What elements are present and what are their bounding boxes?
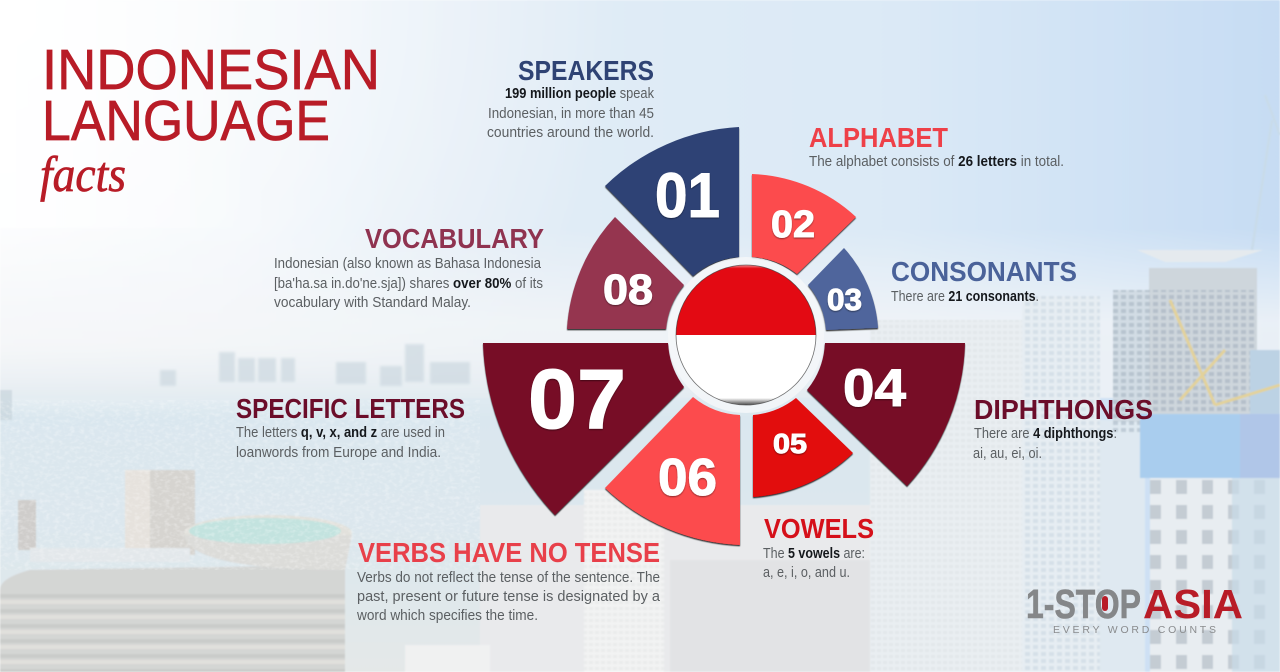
logo: 1-Stop Asia xyxy=(1026,581,1243,636)
panel: vocabulary: vocabulary with Standard Malay. xyxy=(274,295,471,311)
segment 08: 08 xyxy=(603,266,653,314)
panel: verbs have no tense xyxy=(356,537,661,624)
panel: speakers xyxy=(487,55,655,141)
panel: alphabet xyxy=(809,122,1064,170)
segment 04 xyxy=(807,343,965,486)
segment 01: 01 xyxy=(655,161,720,231)
segment 03 xyxy=(808,248,878,330)
panel: verbs have no tense: past, present or future tense is designated by a xyxy=(357,589,661,605)
icon: Indonesian flag button xyxy=(668,257,824,413)
panel: specific letters xyxy=(236,393,465,461)
segment 02 xyxy=(752,174,856,274)
title: INDONESIAN xyxy=(42,38,380,102)
hotel with helipad, bottom left xyxy=(0,565,345,672)
panel: vocabulary xyxy=(274,223,544,311)
panel: specific letters: loanwords from Europe and India. xyxy=(236,445,441,461)
panel: vowels: The 5 vowels are: xyxy=(763,546,865,562)
panel: verbs have no tense: Verbs do not reflect the tense of the sentence. The xyxy=(357,570,660,586)
panel: vocabulary: VOCABULARY xyxy=(365,223,544,254)
panel: speakers: 199 million people speak xyxy=(505,86,655,102)
panel: vocabulary: Indonesian (also known as Bahasa Indonesia xyxy=(274,256,542,272)
segment 07: 07 xyxy=(528,352,626,446)
panel: vocabulary: [ba'ha.sa in.do'ne.sja]) shares over 80% of its xyxy=(274,276,543,292)
panel: consonants xyxy=(891,256,1077,305)
segment 06: 06 xyxy=(658,449,717,507)
title: facts xyxy=(40,146,126,202)
segment 01 xyxy=(605,127,739,276)
panel: verbs have no tense: VERBS HAVE NO TENSE xyxy=(358,537,660,568)
panel: vowels: a, e, i, o, and u. xyxy=(763,565,850,581)
panel: alphabet: ALPHABET xyxy=(809,122,948,153)
panel: diphthongs: DIPHTHONGS xyxy=(974,394,1153,425)
segment 06 xyxy=(605,397,740,545)
logo: 1-Stop Asia: EVERY WORD COUNTS xyxy=(1053,624,1216,636)
panel: diphthongs: ai, au, ei, oi. xyxy=(973,446,1042,462)
segment 08 xyxy=(567,217,684,329)
panel: speakers: SPEAKERS xyxy=(518,55,654,86)
panel: vowels: VOWELS xyxy=(764,513,874,544)
panel: diphthongs xyxy=(973,394,1153,462)
segment 07 xyxy=(483,343,684,515)
panel: speakers: Indonesian, in more than 45 xyxy=(488,106,654,122)
panel: diphthongs: There are 4 diphthongs: xyxy=(974,426,1117,442)
logo: 1-Stop Asia: 1-STOP xyxy=(1026,581,1141,627)
logo: 1-Stop Asia: ASIA xyxy=(1143,581,1243,627)
title: LANGUAGE xyxy=(42,89,330,153)
panel: consonants: There are 21 consonants. xyxy=(891,289,1039,305)
title xyxy=(40,38,380,202)
segment 03: 03 xyxy=(827,282,862,317)
segment 02: 02 xyxy=(771,204,815,246)
panel: specific letters: The letters q, v, x, and z are used in xyxy=(236,425,445,441)
panel: vowels xyxy=(763,513,874,581)
segment 05: 05 xyxy=(773,428,807,459)
panel: verbs have no tense: word which specifies the time. xyxy=(356,608,538,624)
panel: consonants: CONSONANTS xyxy=(891,256,1077,287)
segmented circle diagram xyxy=(483,127,965,545)
segment 04: 04 xyxy=(843,359,907,418)
right towers xyxy=(1022,296,1100,672)
panel: specific letters: SPECIFIC LETTERS xyxy=(236,393,465,424)
panel: alphabet: The alphabet consists of 26 letters in total. xyxy=(809,154,1064,170)
panel: speakers: countries around the world. xyxy=(487,125,654,141)
segment 05 xyxy=(753,398,853,497)
centre buildings xyxy=(480,505,890,672)
